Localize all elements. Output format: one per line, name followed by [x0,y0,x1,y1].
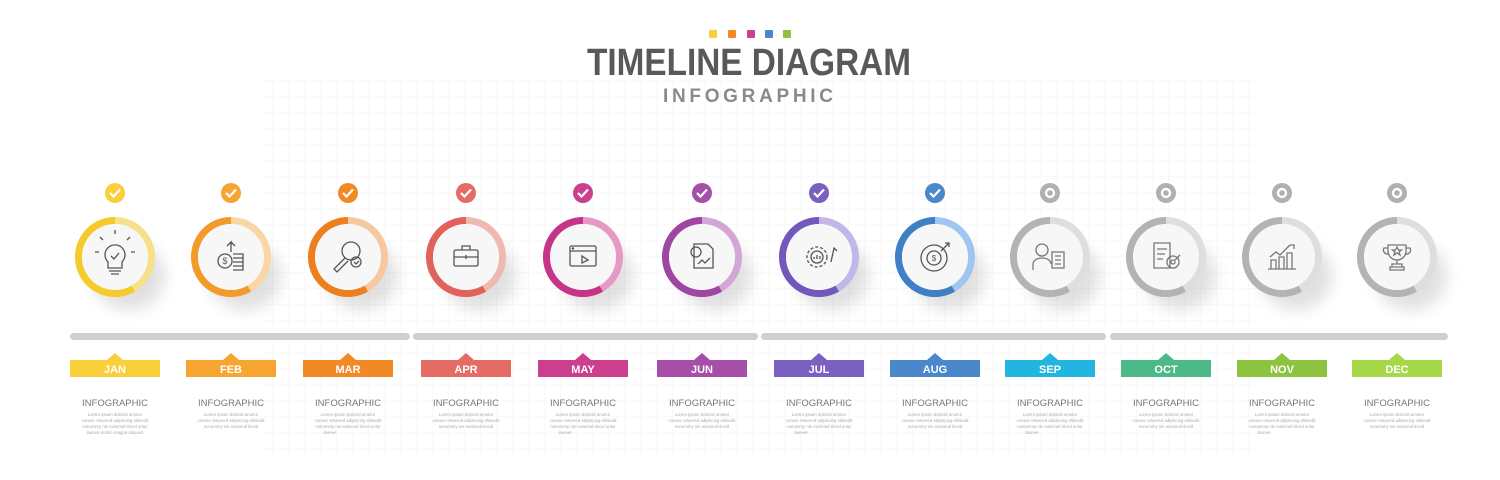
step: APR: APR [454,364,478,376]
step: NOV: INFOGRAPHIC [1249,398,1315,409]
step: NOV: consec tetuered adipiscing elitsedd [1249,418,1316,423]
step: MAY: nonummy nie euismod tincid untur [550,424,616,429]
step: AUG [890,183,985,429]
step: OCT [1121,183,1216,429]
step: APR: nonummy nie euismod tincid [439,424,494,429]
step: OCT: nonummy nie euismod tincid [1139,424,1194,429]
step: MAR [303,183,398,435]
step: FEB [186,183,281,429]
step: MAR: consec tetuered adipiscing elitsedd [315,418,382,423]
timeline bars [70,333,1448,340]
step: JUN: nonummy nie euismod tincid [675,424,730,429]
step: JUL: laoreet [794,430,808,435]
step: JUL: JUL [809,364,830,376]
step: OCT: OCT [1154,364,1178,376]
step: APR: INFOGRAPHIC [433,398,499,409]
step: FEB: $ [222,256,228,266]
title: TIMELINE DIAGRAM [587,42,911,84]
step: NOV: Lorem ipsum dolorsit ametur [1255,412,1310,417]
step: FEB: FEB [220,364,242,376]
step: AUG: INFOGRAPHIC [902,398,968,409]
step: JAN: JAN [104,364,126,376]
step: APR: Lorem ipsum dolorsit ametur [439,412,494,417]
step: JUL: INFOGRAPHIC [786,398,852,409]
step: JUN: Lorem ipsum dolorsit ametur [675,412,730,417]
step: NOV: nonummy nie euismod tincid untur [1249,424,1315,429]
step: MAR: nonummy nie euismod tincid untur [315,424,381,429]
step: OCT: Lorem ipsum dolorsit ametur [1139,412,1194,417]
step: APR [421,183,516,429]
step: DEC [1352,183,1447,429]
step: JUN: INFOGRAPHIC [669,398,735,409]
step: AUG: nonummy nie euismod tincid [908,424,963,429]
step: AUG: consec tetuered adipiscing elitsedd [902,418,969,423]
step: NOV [1237,183,1332,435]
step: SEP: INFOGRAPHIC [1017,398,1083,409]
step: DEC: DEC [1385,364,1409,376]
step: NOV: laoreet [1257,430,1271,435]
step: JAN: Lorem ipsum dolorsit ametur [88,412,143,417]
step: FEB: Lorem ipsum dolorsit ametur [204,412,259,417]
step: DEC: consec tetuered adipiscing elitsedd [1364,418,1431,423]
step: JUL: consec tetuered adipiscing elitsedd [786,418,853,423]
step: JUL [774,183,869,435]
step: MAY: Lorem ipsum dolorsit ametur [556,412,611,417]
step: MAY: MAY [571,364,595,376]
step: JAN: nonummy nie euismod tincid untur [82,424,148,429]
step: MAY: consec tetuered adipiscing elitsedd [550,418,617,423]
step: MAY: laoreet [558,430,572,435]
step: SEP: Lorem ipsum dolorsit ametur [1023,412,1078,417]
step: MAR: INFOGRAPHIC [315,398,381,409]
step: DEC: Lorem ipsum dolorsit ametur [1370,412,1425,417]
step: NOV: NOV [1270,364,1295,376]
step: JUL: Lorem ipsum dolorsit ametur [792,412,847,417]
step: JAN: INFOGRAPHIC [82,398,148,409]
step: JAN: consec tetuered adipiscing elitsedd [82,418,149,423]
step: SEP [1005,183,1100,435]
step: JUN [657,183,752,429]
color squares [709,30,791,38]
step: SEP: laoreet [1025,430,1039,435]
step: DEC: nonummy nie euismod tincid [1370,424,1425,429]
step: AUG: Lorem ipsum dolorsit ametur [908,412,963,417]
step: AUG: $ [932,254,937,263]
step: FEB: nonummy nie euismod tincid [204,424,259,429]
step: FEB: INFOGRAPHIC [198,398,264,409]
step: APR: consec tetuered adipiscing elitsedd [433,418,500,423]
step: SEP: nonummy nie euismod tincid untur [1017,424,1083,429]
step: OCT: consec tetuered adipiscing elitsedd [1133,418,1200,423]
step: SEP: SEP [1039,364,1061,376]
step: DEC: INFOGRAPHIC [1364,398,1430,409]
step: OCT: INFOGRAPHIC [1133,398,1199,409]
step: MAR: laoreet [323,430,337,435]
step: JUN: consec tetuered adipiscing elitsedd [669,418,736,423]
subtitle: INFOGRAPHIC [663,86,833,107]
step: MAR: MAR [335,364,361,376]
step: JUN: JUN [691,364,713,376]
step: MAY: INFOGRAPHIC [550,398,616,409]
step: MAY [538,183,633,435]
step: FEB: consec tetuered adipiscing elitsedd [198,418,265,423]
step: JAN [70,183,165,435]
step: JAN: laoreet dolore magna aliquam [87,430,144,435]
step: MAR: Lorem ipsum dolorsit ametur [321,412,376,417]
step: SEP: consec tetuered adipiscing elitsedd [1017,418,1084,423]
step: AUG: AUG [923,364,947,376]
step: JUL: nonummy nie euismod tincid untur [786,424,852,429]
